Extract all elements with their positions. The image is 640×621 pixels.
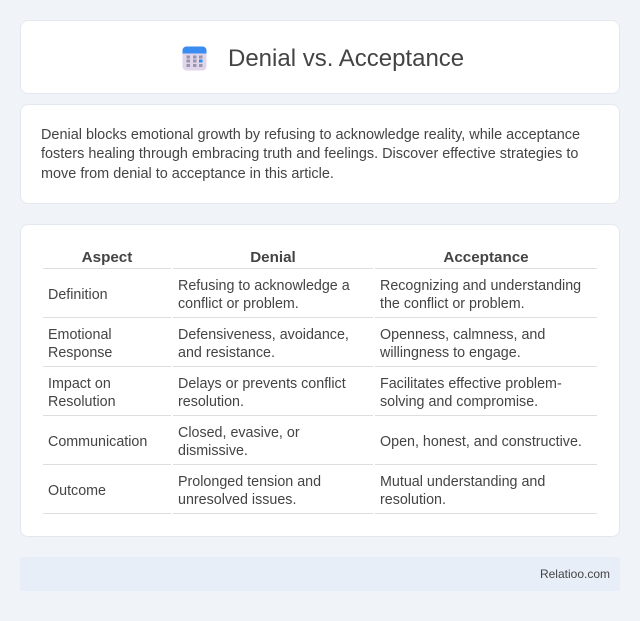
row: outcome: Mutual understanding and (380, 474, 545, 490)
intro text (41, 127, 580, 182)
intro text: move from denial to acceptance in this article. (41, 166, 334, 182)
row: impact on resolution: solving and compromise. (380, 394, 538, 410)
icon: calendar (182, 46, 206, 70)
row: outcome: Outcome (48, 483, 106, 499)
row: emotional response: willingness to engage. (380, 345, 521, 361)
row: communication: Communication (48, 434, 147, 450)
row: impact on resolution (48, 376, 562, 410)
row: emotional response: Defensiveness, avoidance, (178, 327, 349, 343)
panel: comparison table (20, 224, 620, 537)
row: impact on resolution: Delays or prevents conflict (178, 376, 346, 392)
header: aspect: Aspect (82, 249, 132, 266)
row: communication: dismissive. (178, 443, 248, 459)
title: Denial vs. Acceptance (228, 45, 464, 72)
row: impact on resolution: Facilitates effective problem- (380, 376, 562, 392)
header: denial: Denial (250, 249, 296, 266)
panel: title card (20, 20, 620, 94)
row: emotional response: Emotional (48, 327, 112, 343)
row: emotional response (48, 327, 545, 361)
row: definition: Definition (48, 287, 108, 303)
row: impact on resolution: Impact on (48, 376, 111, 392)
intro text: fosters healing through embracing truth and feelings. Discover effective strategies to (41, 146, 578, 162)
footer credit: Relatioo.com (540, 567, 610, 581)
row: emotional response: and resistance. (178, 345, 275, 361)
row: impact on resolution: Resolution (48, 394, 116, 410)
row: communication: Open, honest, and constructive. (380, 434, 582, 450)
row: communication: Closed, evasive, or (178, 425, 300, 441)
row: outcome: resolution. (380, 492, 446, 508)
header: acceptance: Acceptance (443, 249, 529, 266)
intro text: Denial blocks emotional growth by refusing to acknowledge reality, while acceptance (41, 127, 580, 143)
row: definition: Refusing to acknowledge a (178, 278, 350, 294)
row: definition (48, 278, 581, 312)
row: emotional response: Response (48, 345, 112, 361)
row: impact on resolution: resolution. (178, 394, 244, 410)
panel: introduction (20, 104, 620, 204)
row: outcome (48, 474, 545, 508)
footer bar (20, 557, 620, 591)
row: definition: conflict or problem. (178, 296, 299, 312)
row: definition: Recognizing and understanding (380, 278, 581, 294)
row: definition: the conflict or problem. (380, 296, 525, 312)
row: communication (48, 425, 582, 459)
row: outcome: Prolonged tension and (178, 474, 321, 490)
row: emotional response: Openness, calmness, and (380, 327, 545, 343)
row: outcome: unresolved issues. (178, 492, 296, 508)
table (43, 249, 597, 514)
